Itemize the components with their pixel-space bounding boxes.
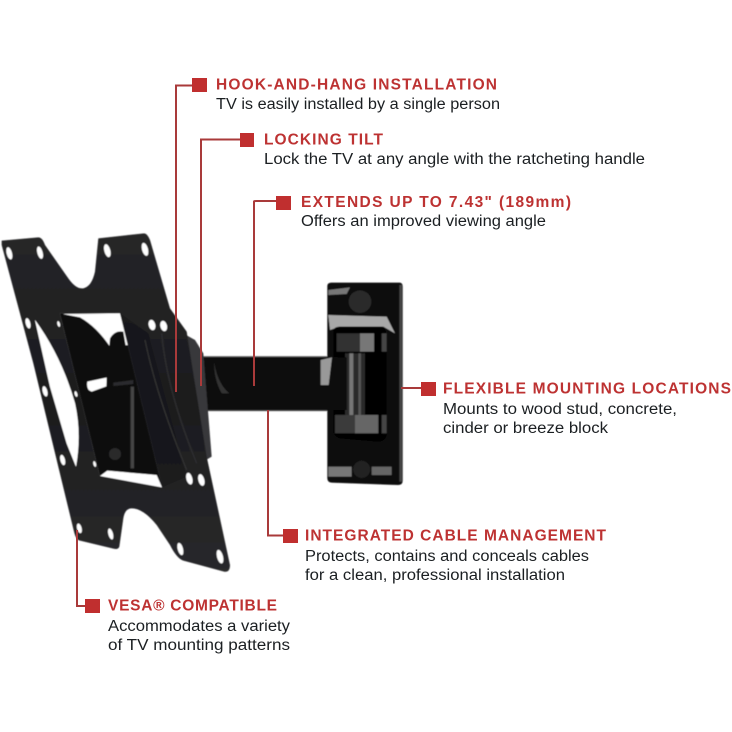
tilt bracket behind plate bbox=[167, 332, 212, 470]
callout: hook-and-hang installation: TV is easily installed by a single person bbox=[216, 96, 500, 113]
callout: flexible mounting locations: Mounts to wood stud, concrete, bbox=[443, 401, 677, 418]
callout: extends up to 7.43 inches bbox=[254, 194, 571, 386]
right strip overlapping bracket bbox=[120, 313, 187, 487]
callout: VESA compatible: of TV mounting patterns bbox=[108, 637, 290, 654]
extension arm bbox=[200, 357, 347, 411]
VESA mounting plate bbox=[2, 233, 230, 572]
callout: integrated cable management: INTEGRATED CABLE MANAGEMENT bbox=[305, 528, 607, 544]
callout: locking tilt bbox=[201, 132, 645, 386]
callout: integrated cable management: for a clean, professional installation bbox=[305, 567, 565, 584]
callout: VESA compatible bbox=[77, 530, 290, 654]
wall plate bbox=[327, 283, 403, 485]
callout: locking tilt: Lock the TV at any angle with the ratcheting handle bbox=[264, 151, 645, 168]
mounting holes bbox=[5, 242, 225, 564]
callout: integrated cable management bbox=[268, 410, 607, 584]
callout: VESA compatible: VESA® COMPATIBLE bbox=[108, 598, 277, 614]
central window: white gaps and dark bracket bbox=[60, 313, 162, 487]
callout: hook-and-hang installation bbox=[176, 76, 500, 392]
wall mount bracket product image bbox=[2, 233, 403, 572]
callout: flexible mounting locations: cinder or breeze block bbox=[443, 420, 608, 437]
callout: locking tilt: LOCKING TILT bbox=[264, 132, 384, 148]
callout: flexible mounting locations: FLEXIBLE MOUNTING LOCATIONS bbox=[443, 380, 731, 398]
callout: integrated cable management: Protects, contains and conceals cables bbox=[305, 548, 589, 565]
callout: flexible mounting locations bbox=[401, 380, 731, 437]
callout: extends up to 7.43 inches: Offers an improved viewing angle bbox=[301, 213, 546, 230]
callout: hook-and-hang installation: HOOK-AND-HANG INSTALLATION bbox=[216, 76, 497, 94]
callout: extends up to 7.43 inches: EXTENDS UP TO 7.43" (189mm) bbox=[301, 194, 571, 211]
callout: VESA compatible: Accommodates a variety bbox=[108, 618, 290, 635]
